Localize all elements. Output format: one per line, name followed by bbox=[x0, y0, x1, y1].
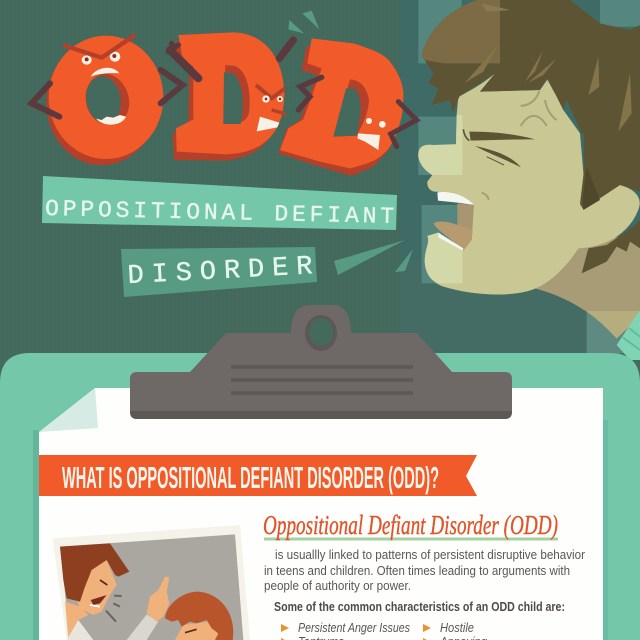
intro paragraph: is usuallly linked to patterns of persistent disruptive behavior bbox=[275, 548, 585, 562]
characteristics heading: Some of the common characteristics of an ODD child are: bbox=[274, 600, 565, 614]
intro paragraph: people of authority or power. bbox=[264, 579, 411, 593]
section banner bbox=[39, 455, 477, 496]
hair back bbox=[582, 220, 640, 273]
sparks beside subtitle bbox=[334, 240, 413, 275]
photo illustration: parent scolding child bbox=[53, 525, 250, 640]
subtitle band: oppositional defiant bbox=[42, 176, 397, 230]
characteristics list: Persistent Anger Issues bbox=[298, 621, 410, 635]
hair bbox=[422, 0, 640, 209]
clipboard clip bbox=[130, 305, 512, 419]
characteristics list bbox=[281, 621, 487, 640]
letter O character bbox=[32, 35, 183, 165]
intro paragraph bbox=[264, 548, 585, 593]
clipboard board bbox=[0, 353, 640, 640]
facial lines bbox=[469, 132, 535, 141]
mouth bbox=[457, 203, 474, 251]
subtitle band: disorder: DISORDER bbox=[127, 252, 313, 292]
intro paragraph: in teens and children. Often times leading to arguments with bbox=[264, 564, 570, 578]
subtitle band: oppositional defiant: OPPOSITIONAL DEFIANT bbox=[45, 196, 394, 230]
letter D character two bbox=[278, 38, 417, 176]
sparks above title bbox=[288, 11, 319, 33]
illustration: shouting boy bbox=[400, 0, 640, 360]
characteristics list: Hostile bbox=[440, 621, 474, 635]
paper sheet bbox=[33, 388, 608, 640]
face bbox=[418, 73, 640, 295]
letter D character one bbox=[168, 32, 293, 161]
